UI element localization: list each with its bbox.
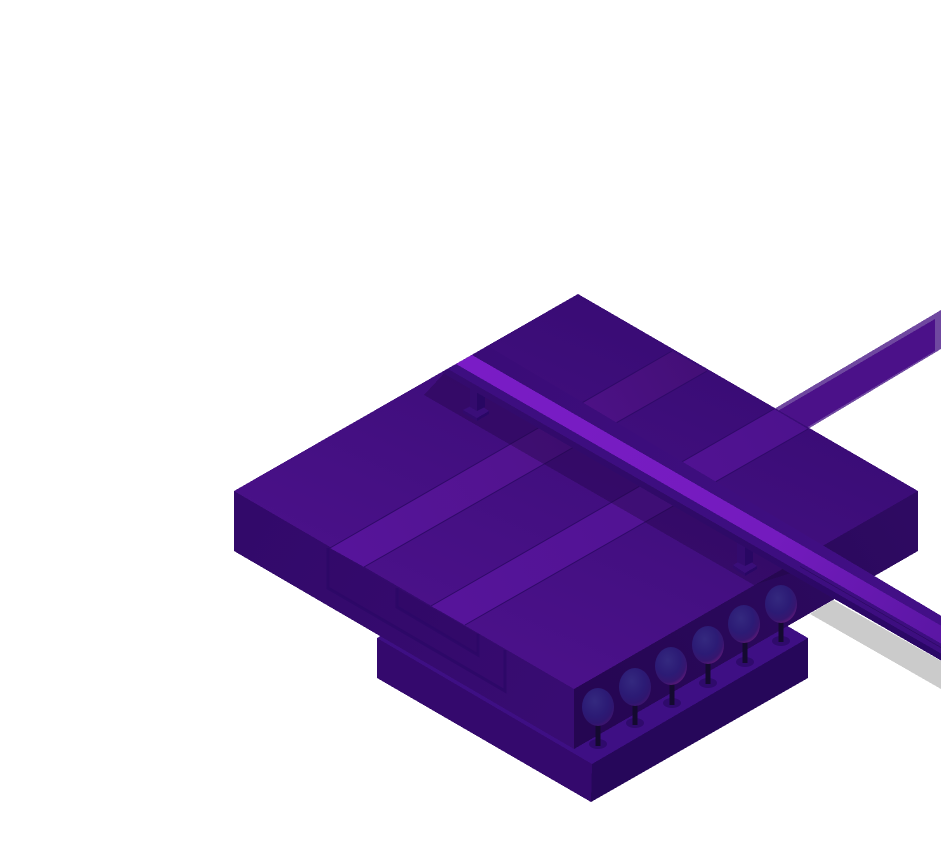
base left face — [377, 638, 592, 802]
lamp row on the base — [582, 585, 797, 749]
outer panel outline — [328, 548, 505, 691]
beam side band — [448, 364, 941, 654]
base right face — [591, 638, 808, 802]
beam bright top — [456, 355, 941, 644]
inner panel outline — [397, 588, 478, 655]
beam shadow on slab — [424, 369, 800, 585]
far strip extension with light border — [774, 310, 941, 429]
lamp two — [619, 668, 651, 728]
main slab — [234, 294, 918, 749]
base top face — [377, 512, 808, 764]
road strip two — [431, 409, 808, 625]
lamp five — [728, 605, 760, 667]
slab top face — [234, 294, 918, 689]
lamp four — [692, 626, 724, 688]
ground shadow of beam — [810, 600, 941, 689]
base block — [377, 512, 808, 802]
strip inner fill — [776, 319, 935, 428]
road strip one — [330, 351, 707, 567]
beam underside — [442, 369, 941, 660]
beam side dividing line — [800, 566, 941, 648]
strip light border — [774, 310, 941, 429]
slab left face — [234, 491, 574, 749]
left face recessed panels — [328, 548, 505, 691]
beam crossing the slab — [442, 346, 941, 660]
support post two — [733, 540, 757, 576]
lamp three — [655, 647, 687, 708]
beam far edge band — [472, 346, 941, 626]
lamp six — [765, 585, 797, 646]
slab right face — [574, 491, 918, 749]
lamp one — [582, 688, 614, 749]
support post one — [463, 385, 489, 421]
